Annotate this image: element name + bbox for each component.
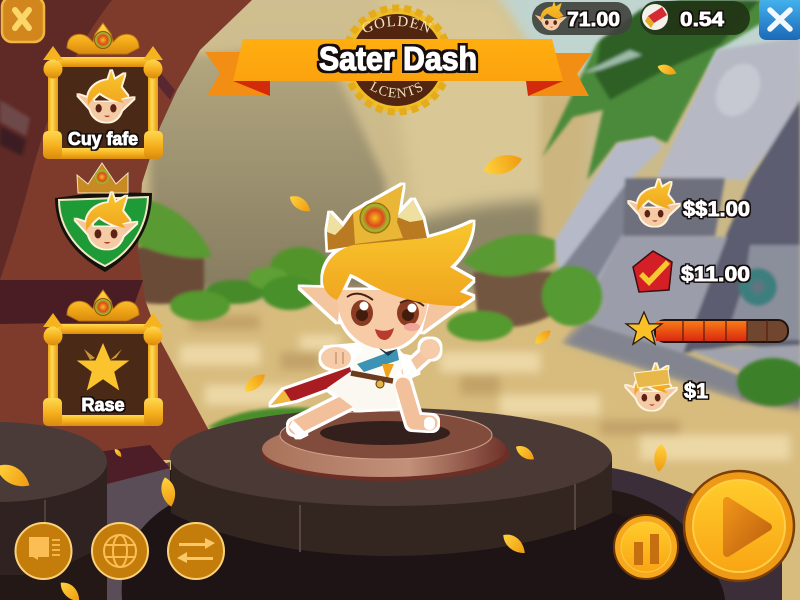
face <box>337 290 428 349</box>
ribbon tails <box>205 52 592 96</box>
card label: Cuy fafe <box>68 129 138 149</box>
pedestal: lower base <box>0 468 782 600</box>
stat row: check badge: $11.00 <box>681 263 750 286</box>
pedestal: stone column <box>97 445 170 600</box>
shoes <box>289 417 435 437</box>
stat row: currency <box>628 180 750 226</box>
seal badge: GOLDEN <box>362 16 432 33</box>
pause button <box>614 515 678 579</box>
title text: Sater Dash <box>319 40 477 77</box>
legs <box>296 385 430 427</box>
character card 1 <box>43 23 163 159</box>
character card 2 <box>43 290 163 426</box>
icon: token <box>642 4 668 30</box>
copper plate <box>262 411 510 481</box>
shaded rock hump <box>150 50 390 290</box>
seal badge <box>346 4 448 116</box>
pedestal: lower ring <box>122 490 725 600</box>
shaded right wall <box>385 200 560 290</box>
currency pill: gems <box>640 1 750 35</box>
title ribbon <box>205 4 592 116</box>
icon: star <box>626 312 662 344</box>
sunlit wall <box>380 0 570 260</box>
close button right <box>759 0 800 40</box>
stats panel <box>625 180 788 410</box>
crown <box>327 185 427 250</box>
pedestal: left block <box>0 422 107 575</box>
skirt <box>327 372 398 410</box>
stone ruins <box>553 37 800 420</box>
sky <box>490 0 800 70</box>
sand right <box>540 90 590 270</box>
character <box>271 185 473 437</box>
shirt and arms <box>321 339 440 378</box>
currency pill: gems: 0.54 <box>680 8 725 31</box>
seal badge: LCENTS <box>370 81 422 98</box>
bottom button: swap arrows <box>168 523 224 579</box>
floating golden leaves <box>0 62 678 600</box>
ears <box>300 287 470 332</box>
stat row: avatar: $1 <box>684 380 708 403</box>
currency pill: coins: 71.00 <box>567 8 620 31</box>
icon: gold star <box>77 343 129 390</box>
palm leaves <box>542 0 800 180</box>
sandy checker ground <box>130 302 800 600</box>
stat row: check badge <box>633 251 750 292</box>
stat row: currency: $$1.00 <box>683 198 750 221</box>
ribbon band <box>233 39 563 81</box>
tree trunk <box>0 0 252 460</box>
bushes and pots <box>125 195 800 430</box>
portrait <box>75 192 137 249</box>
icon: coin head <box>535 1 567 30</box>
portrait <box>78 70 134 122</box>
progress bar <box>626 312 788 344</box>
hair <box>323 222 473 306</box>
sword <box>271 367 353 405</box>
close button left <box>2 0 44 42</box>
green shield badge <box>55 163 152 272</box>
crown <box>77 163 128 193</box>
stat row: avatar <box>625 364 708 410</box>
pedestal: central block <box>170 408 612 556</box>
currency pill: coins <box>532 1 632 35</box>
scarf and belt <box>351 345 399 388</box>
bottom button: globe <box>92 523 148 579</box>
bottom button: chat <box>16 523 72 579</box>
card label: Rase <box>82 395 124 415</box>
play button <box>684 471 794 581</box>
